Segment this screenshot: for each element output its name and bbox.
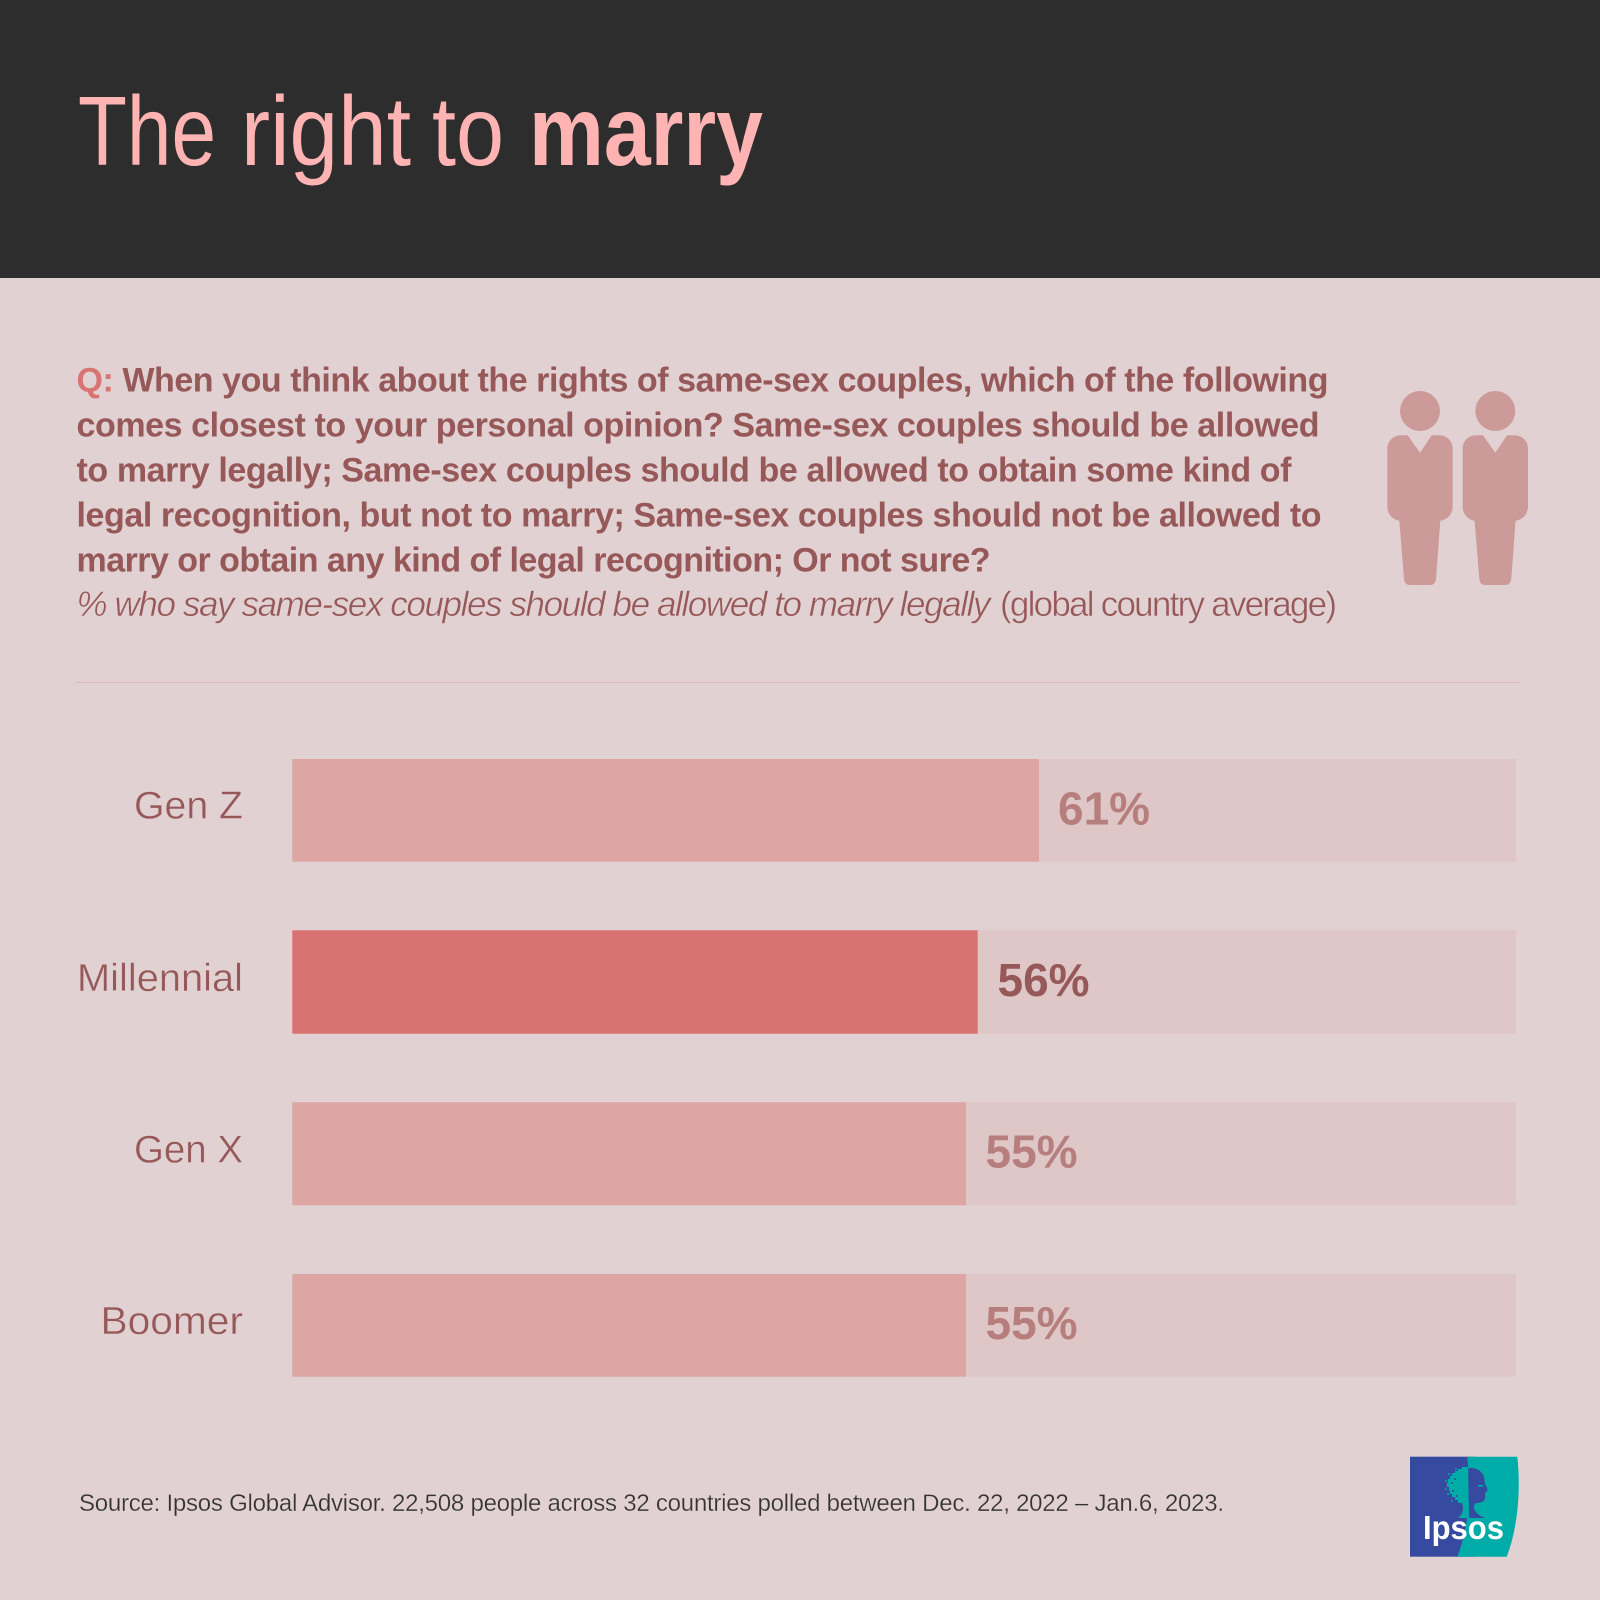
question subtitle: (global country average) — [1000, 585, 1337, 624]
source note: Source: Ipsos Global Advisor. 22,508 people across 32 countries polled between Dec. 22, 2022 – Jan.6, 2023. — [79, 1490, 1224, 1517]
row: Gen X: Gen X — [134, 1128, 243, 1172]
title: marry — [529, 76, 763, 186]
row: Millennial — [77, 930, 1516, 1034]
header band — [0, 0, 1600, 278]
icon: Ipsos logo: Ipsos — [1423, 1509, 1504, 1546]
title — [78, 76, 763, 186]
row: Gen Z: Gen Z — [134, 785, 243, 828]
question text block: legal recognition, but not to marry; Same-sex couples should not be allowed to — [76, 497, 1322, 535]
row: Gen Z: 61% — [1058, 782, 1150, 834]
title: to — [432, 76, 504, 186]
question text block: marry or obtain any kind of legal recognition; Or not sure? — [76, 542, 990, 580]
question text block: comes closest to your personal opinion? Same-sex couples should be allowed — [76, 407, 1320, 445]
row: Boomer — [100, 1274, 1516, 1377]
row: Boomer: 55% — [986, 1297, 1078, 1349]
question text block: Q: When you think about the rights of same-sex couples, which of the following — [76, 362, 1328, 400]
row: Gen Z — [134, 759, 1516, 862]
row: Boomer: Boomer — [100, 1300, 243, 1343]
title: right — [241, 76, 411, 186]
row: Gen X — [134, 1102, 1516, 1205]
icon: Ipsos logo — [1410, 1457, 1519, 1557]
icon: two men in suits — [1387, 391, 1528, 585]
question subtitle: % who say same-sex couples should be allowed to marry legally — [76, 585, 993, 624]
question text block — [76, 362, 1328, 580]
title: The — [78, 76, 216, 186]
row: Millennial: Millennial — [77, 957, 243, 1000]
row: Gen X: 55% — [986, 1126, 1078, 1178]
row: Millennial: 56% — [998, 954, 1090, 1006]
bar chart — [77, 759, 1516, 1377]
question text block: to marry legally; Same-sex couples should be allowed to obtain some kind of — [76, 452, 1292, 490]
